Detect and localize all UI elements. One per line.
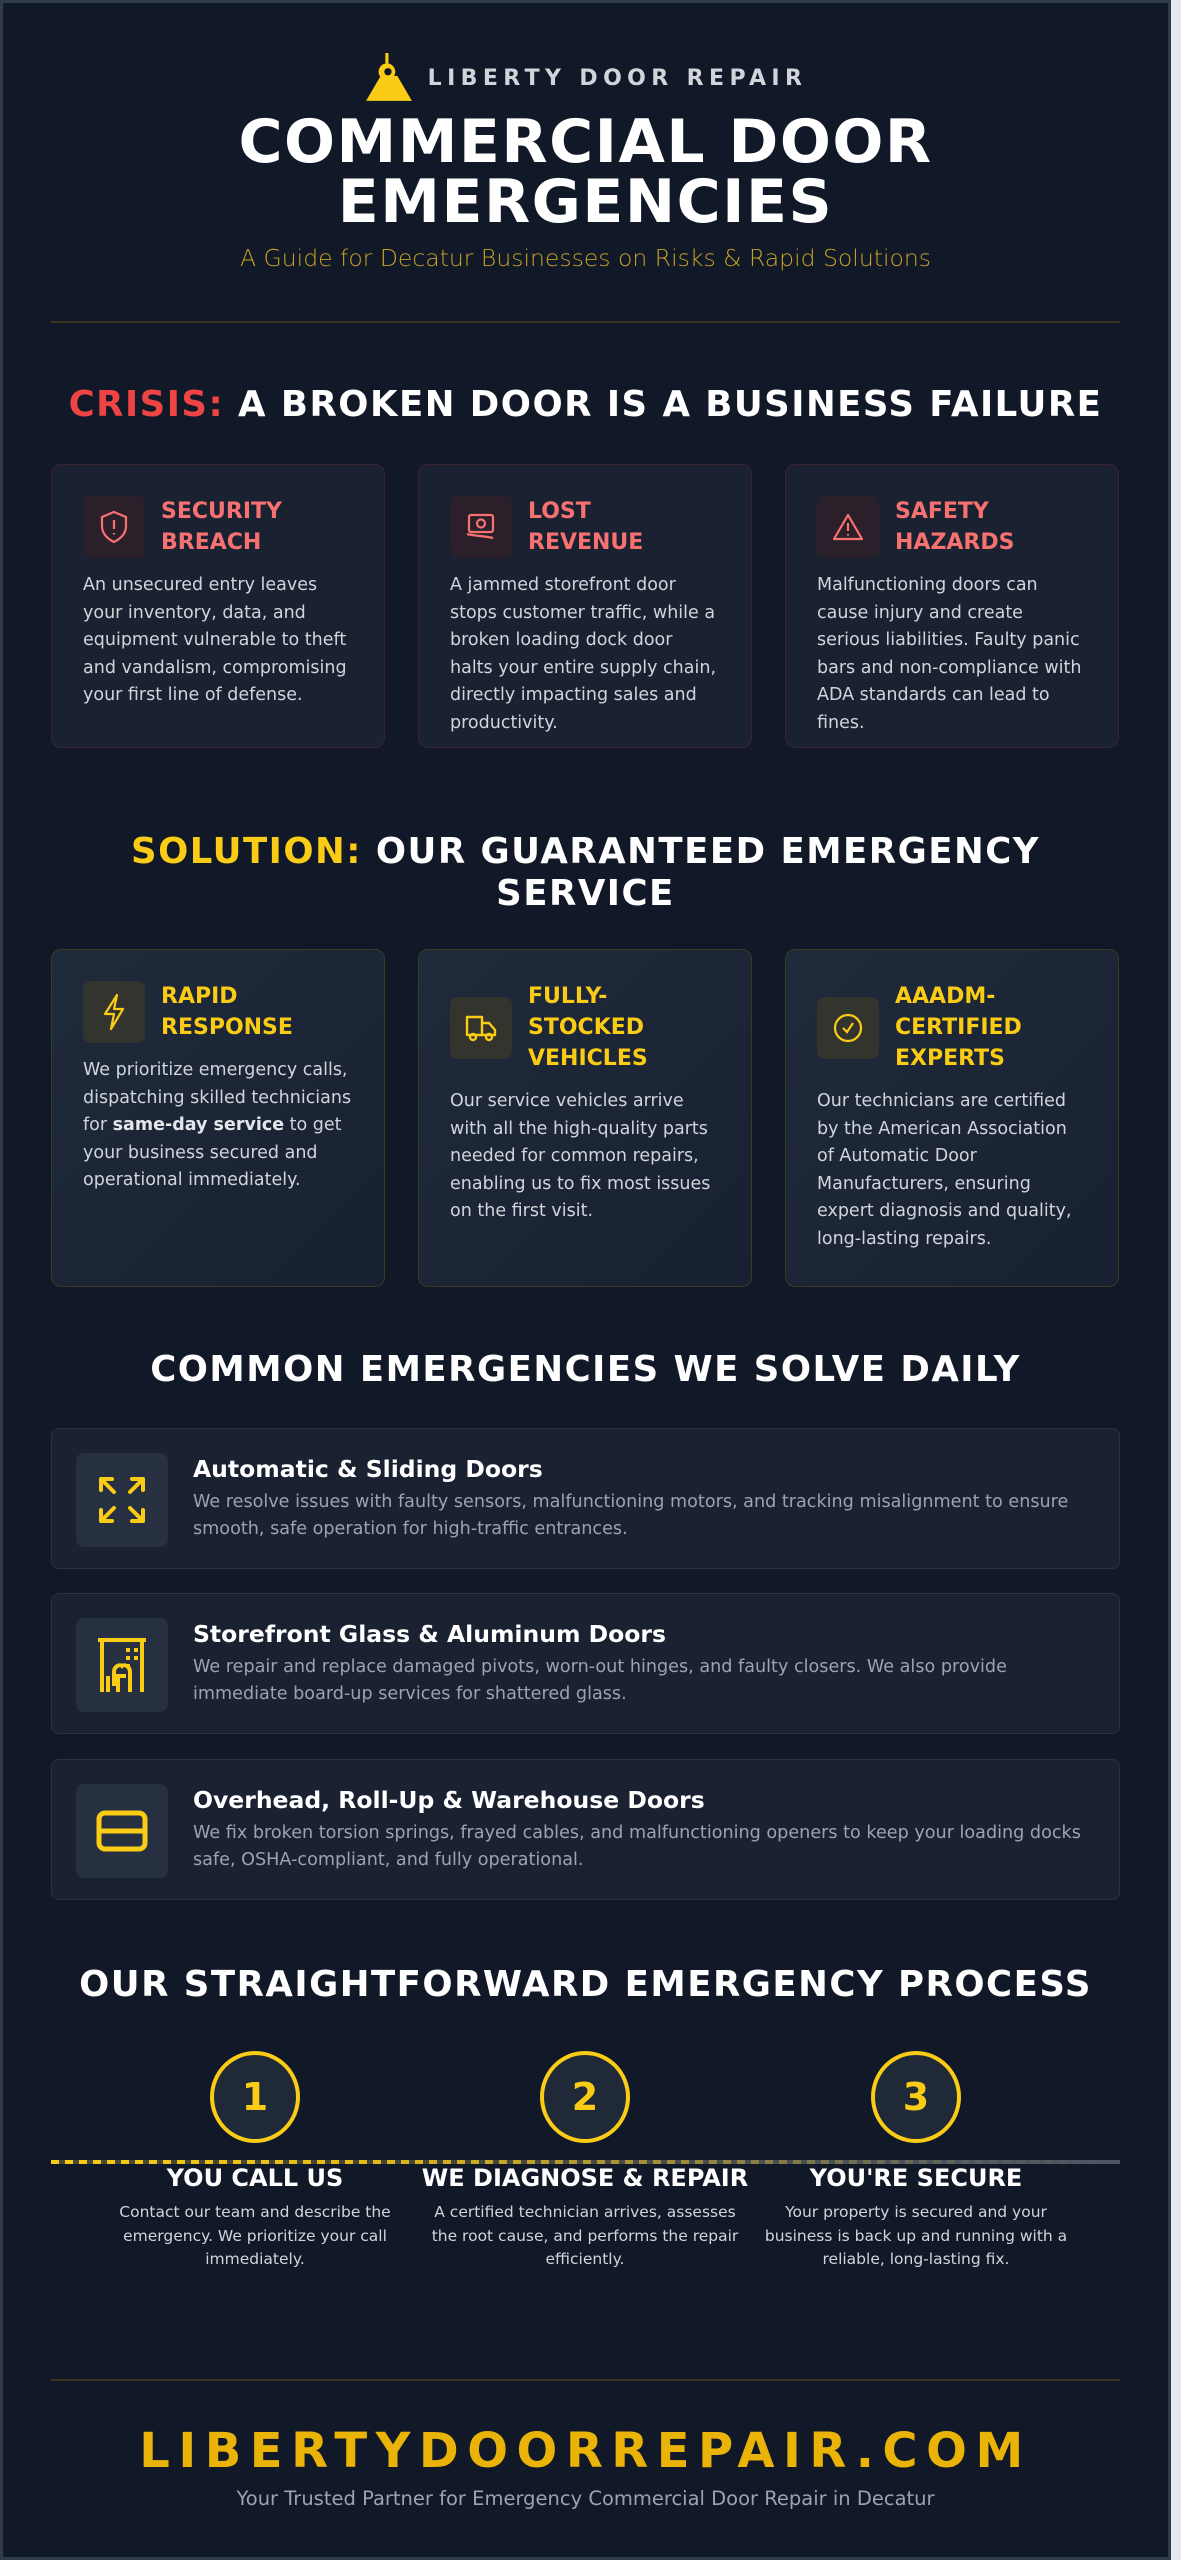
panel: aaadm-certified experts: EXPERTS — [895, 1046, 1005, 1071]
panel: aaadm-certified experts: Our technicians are certified by the American Association of Automatic Door Manufacturers, ensuring expert diagnosis and quality, long-lasting repairs. — [817, 1091, 1072, 1248]
row: storefront glass & aluminum doors: We repair and replace damaged pivots, worn-out hinges, and faulty closers. We also provide immediate board-up services for shattered glass. — [193, 1657, 1007, 1704]
heading: crisis: CRISIS: A BROKEN DOOR IS A BUSINESS FAILURE — [69, 384, 1102, 425]
panel: fully-stocked vehicles: FULLY- — [528, 984, 607, 1009]
heading: process: OUR STRAIGHTFORWARD EMERGENCY PROCESS — [79, 1964, 1092, 2005]
row: automatic & sliding doors — [51, 1428, 1120, 1569]
panel: lost revenue: REVENUE — [528, 530, 643, 555]
panel: fully-stocked vehicles: VEHICLES — [528, 1046, 648, 1071]
icon: roll-up door — [76, 1784, 168, 1878]
icon: expand arrows — [76, 1453, 168, 1547]
panel: lost revenue: A jammed storefront door stops customer traffic, while a broken loading dock door halts your entire supply chain, directly impacting sales and productivity. — [450, 575, 716, 732]
row: storefront glass & aluminum doors: Storefront Glass & Aluminum Doors — [193, 1620, 666, 1648]
text: 3 — [903, 2075, 929, 2119]
row: overhead doors: We fix broken torsion springs, frayed cables, and malfunctioning openers to keep your loading docks safe, OSHA-compliant, and fully operational. — [193, 1823, 1081, 1870]
subtitle: A Guide for Decatur Businesses on Risks & Rapid Solutions — [240, 244, 931, 272]
heading: solution: SOLUTION: OUR GUARANTEED EMERGENCY — [131, 831, 1040, 872]
heading: common emergencies: COMMON EMERGENCIES WE SOLVE DAILY — [150, 1349, 1021, 1390]
panel: aaadm-certified experts — [785, 949, 1119, 1287]
panel: safety hazards: SAFETY — [895, 499, 989, 524]
panel: fully-stocked vehicles: STOCKED — [528, 1015, 644, 1040]
heading: solution: SERVICE — [496, 873, 675, 914]
panel: security breach — [51, 464, 385, 748]
row: automatic & sliding doors: We resolve issues with faulty sensors, malfunctioning motors, and tracking misalignment to ensure smooth, safe operation for high-traffic entrances. — [193, 1492, 1068, 1539]
text: 1 — [242, 2075, 268, 2119]
panel: security breach: BREACH — [161, 530, 261, 555]
row: overhead doors: Overhead, Roll-Up & Warehouse Doors — [193, 1786, 705, 1814]
row: automatic & sliding doors: Automatic & Sliding Doors — [193, 1455, 543, 1483]
footer tagline: Your Trusted Partner for Emergency Commercial Door Repair in Decatur — [236, 2487, 935, 2510]
panel: safety hazards: HAZARDS — [895, 530, 1014, 555]
panel: security breach: An unsecured entry leaves your inventory, data, and equipment vulnerable to theft and vandalism, compromising your first line of defense. — [83, 575, 347, 705]
heading: solution — [131, 831, 1040, 914]
panel: safety hazards — [785, 464, 1119, 748]
title: COMMERCIAL DOOR — [238, 107, 933, 177]
panel: aaadm-certified experts: AAADM- — [895, 984, 995, 1009]
step 1 — [119, 2051, 391, 2268]
panel: security breach: SECURITY — [161, 499, 282, 524]
panel: safety hazards: Malfunctioning doors can cause injury and create serious liabilities. Faulty panic bars and non-compliance with ADA standards can lead to fines. — [817, 575, 1082, 732]
panel: lost revenue — [418, 464, 752, 748]
step 2 — [422, 2051, 748, 2268]
panel: fully-stocked vehicles — [418, 949, 752, 1287]
header: logo and brand: LIBERTY DOOR REPAIR — [428, 66, 807, 90]
panel: rapid response: RAPID — [161, 984, 238, 1009]
timeline line — [51, 2160, 1120, 2164]
text: WE DIAGNOSE & REPAIR — [422, 2164, 748, 2192]
text: A certified technician arrives, assesses the root cause, and performs the repair efficiently. — [432, 2203, 738, 2268]
panel: rapid response: We prioritize emergency calls, dispatching skilled technicians for same-day service to get your business secured and operational immediately. — [83, 1060, 351, 1190]
text: YOU'RE SECURE — [810, 2164, 1022, 2192]
text: 2 — [572, 2075, 598, 2119]
text: Contact our team and describe the emergency. We prioritize your call immediately. — [119, 2203, 391, 2268]
text: YOU CALL US — [167, 2164, 343, 2192]
title — [238, 107, 933, 237]
panel: lost revenue: LOST — [528, 499, 591, 524]
icon: liberty bell logo — [366, 53, 412, 101]
row: storefront glass & aluminum doors — [51, 1593, 1120, 1734]
row: overhead doors — [51, 1759, 1120, 1900]
header: logo and brand — [366, 53, 807, 101]
panel: fully-stocked vehicles: Our service vehicles arrive with all the high-quality parts needed for common repairs, enabling us to fix most issues on the first visit. — [450, 1091, 710, 1221]
text: Your property is secured and your business is back up and running with a reliable, long-lasting fix. — [765, 2203, 1067, 2268]
panel: rapid response — [51, 949, 385, 1287]
panel: rapid response: RESPONSE — [161, 1015, 293, 1040]
title: EMERGENCIES — [338, 167, 833, 237]
panel: aaadm-certified experts: CERTIFIED — [895, 1015, 1022, 1040]
icon: storefront — [76, 1618, 168, 1712]
step 3 — [765, 2051, 1067, 2268]
footer url: LIBERTYDOORREPAIR.COM — [139, 2423, 1032, 2479]
